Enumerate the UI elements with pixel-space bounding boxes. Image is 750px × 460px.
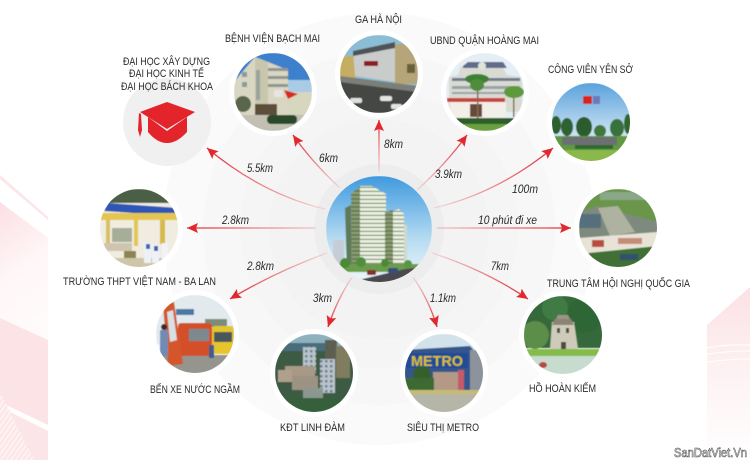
arrow: to Metro [413,277,437,327]
arrow: to UBND [417,135,467,190]
label: Bach Mai: BỆNH VIỆN BẠCH MAI [225,32,320,45]
arrow: to Nuoc Ngam station [230,253,327,299]
distance labels [221,139,538,305]
photo: Nuoc Ngam bus station [156,295,234,373]
left decorative pink shapes [0,175,48,460]
arrows [187,120,571,327]
label: bus station: BẾN XE NƯỚC NGẦM [150,383,240,396]
photo: Metro supermarket: METRO [411,353,463,370]
background concentric rings [163,13,595,445]
label: universities: ĐẠI HỌC XÂY DỰNG [123,55,210,68]
distance: Ga Ha Noi: 8km [384,139,403,151]
label: Metro: SIÊU THỊ METRO [407,421,479,434]
distance: Hoan Kiem: 7km [491,261,509,273]
label: convention centre: TRUNG TÂM HỘI NGHỊ QUỐC GIA [547,276,691,290]
right decorative pink shape [707,287,750,460]
labels: destinations [63,13,691,434]
distance: universities: 5.5km [247,163,273,175]
distance: Metro: 1.1km [430,293,456,305]
label: Hoan Kiem: HỒ HOÀN KIẾM [529,382,596,395]
distance: Yen So: 100m [512,184,538,196]
arrow: to Yen So park [434,148,553,208]
arrow: to Ga Ha Noi [378,120,380,172]
distance: Bach Mai: 6km [319,153,338,165]
photo: Yen So park [552,83,630,161]
photo: Bach Mai hospital [234,53,314,136]
photo: Viet Nam - Ba Lan school [100,189,178,267]
photo: Metro supermarket [401,329,483,412]
arrow: to Bach Mai [293,135,340,188]
distance: bus station: 2.8km [246,261,274,273]
label: UBND: UBND QUẬN HOÀNG MAI [430,34,539,47]
photo: KDT Linh Dam [275,329,357,412]
distance: UBND: 3.9km [435,169,462,181]
photo: Ga Ha Noi station [340,35,418,118]
arrow: to convention centre [437,227,571,229]
label: universities: ĐẠI HỌC BÁCH KHOA [121,80,214,93]
distance: school: 2.8km [221,215,249,227]
label: universities: ĐẠI HỌC KINH TẾ [129,67,204,80]
arrow: to universities [207,148,325,209]
icon: graduation cap in grey circle [123,78,211,166]
arrow: to Viet Nam Ba Lan school [187,227,315,229]
center photo: apartment towers [326,176,432,285]
arrow: to Linh Dam [328,277,352,327]
distance: Linh Dam: 3km [313,293,332,305]
label: Linh Dam: KĐT LINH ĐÀM [280,421,345,434]
distance: convention centre: 10 phút đi xe [478,215,537,227]
photo: Hoan Kiem lake [524,296,602,374]
label: school: TRƯỜNG THPT VIỆT NAM - BA LAN [63,275,216,288]
label: Ga Ha Noi: GA HÀ NỘI [355,13,402,26]
photo: National Convention Center [579,189,657,267]
photo: UBND Hoang Mai [444,53,524,136]
arrow: to Hoan Kiem [432,253,528,299]
label: universities [121,55,214,93]
label: Yen So park: CÔNG VIÊN YÊN SỞ [548,63,633,76]
